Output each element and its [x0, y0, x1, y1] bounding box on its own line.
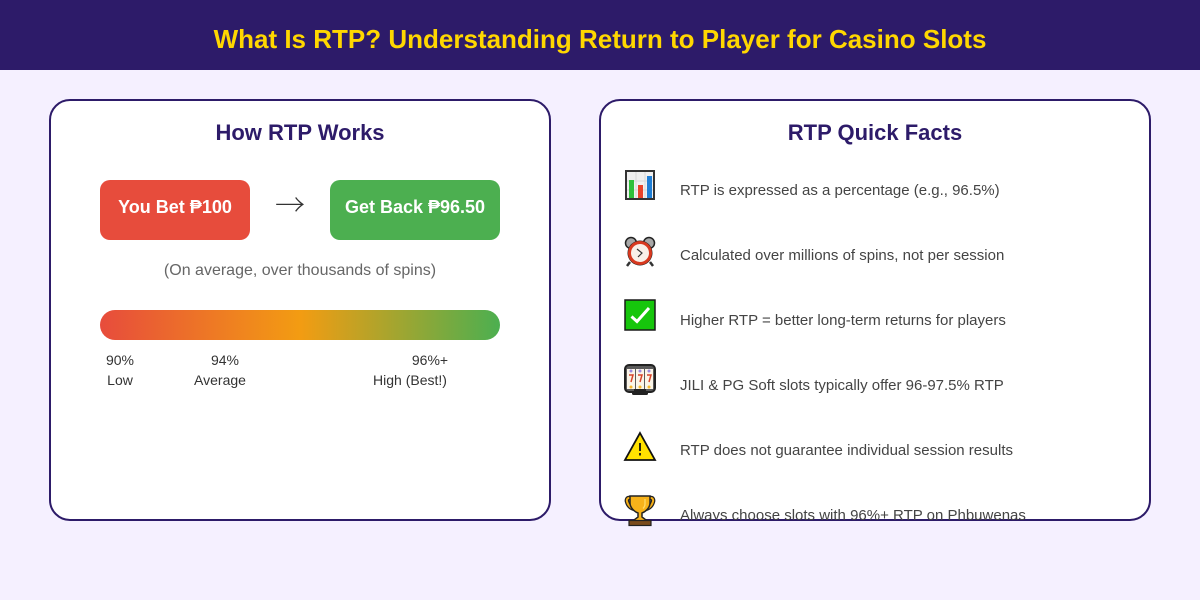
fact text 4: JILI & PG Soft slots typically offer 96-97.5% RTP	[680, 377, 1004, 394]
button: Get Back	[330, 180, 500, 240]
fact text 2: Calculated over millions of spins, not per session	[680, 247, 1004, 264]
arrow: →	[275, 181, 305, 225]
caption: (On average, over thousands of spins)	[164, 262, 436, 279]
panel heading: RTP Quick Facts: RTP Quick Facts	[788, 120, 962, 145]
scale label: 94% Average: 94%	[211, 352, 239, 368]
button: You Bet: You Bet ₱100	[118, 197, 232, 217]
title: What Is RTP? Understanding Return to Player for Casino Slots	[214, 24, 986, 54]
scale label: 90% Low: Low	[107, 372, 134, 388]
icon: trophy	[627, 496, 653, 526]
scale label: 96%+ High: High (Best!)	[373, 372, 447, 388]
header band	[0, 0, 1200, 70]
scale label: 94% Average: Average	[194, 372, 246, 388]
fact text 5: RTP does not guarantee individual session results	[680, 442, 1013, 459]
icon: warning triangle	[625, 433, 655, 460]
button: You Bet	[100, 180, 250, 240]
scale label: 96%+ High: 96%+	[412, 352, 448, 368]
gradient scale bar	[100, 310, 500, 340]
fact text 6 (cut off by panel edge): Always choose slots with 96%+ RTP on Phbuwenas	[680, 507, 1026, 524]
scale label: 90% Low	[106, 352, 134, 388]
scale label: 90% Low: 90%	[106, 352, 134, 368]
fact text 1: RTP is expressed as a percentage (e.g., 96.5%)	[680, 182, 1000, 199]
panel heading: How RTP Works: How RTP Works	[215, 120, 385, 145]
icon: check mark	[625, 300, 655, 330]
icon: slot machine	[625, 365, 655, 395]
panel: RTP Quick Facts	[600, 100, 1150, 526]
icon: bar chart	[626, 171, 654, 199]
button: Get Back: Get Back ₱96.50	[345, 197, 485, 217]
icon: alarm clock	[626, 238, 654, 266]
scale label: 96%+ High	[373, 352, 448, 388]
panel: How RTP Works	[50, 100, 550, 520]
scale label: 94% Average	[194, 352, 246, 388]
fact text 3: Higher RTP = better long-term returns for players	[680, 312, 1006, 329]
